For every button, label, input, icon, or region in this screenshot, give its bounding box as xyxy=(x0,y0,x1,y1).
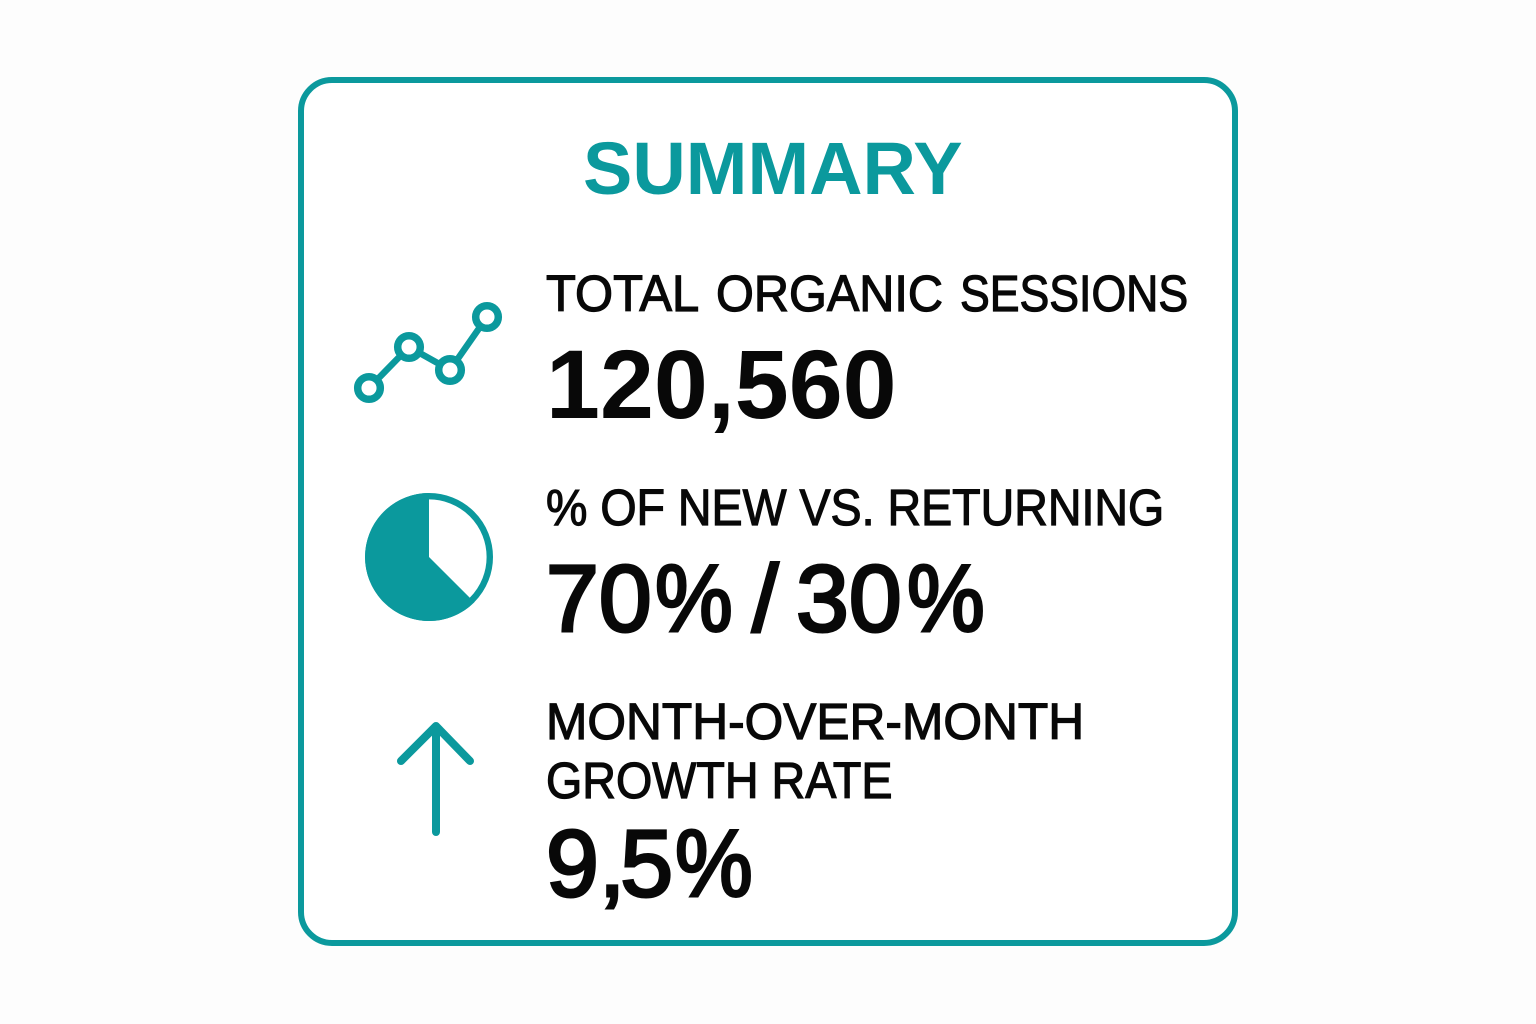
value: new vs returning xyxy=(546,546,984,652)
value: new vs returning: % xyxy=(655,546,732,652)
value: growth rate: % xyxy=(675,811,753,917)
label: total organic sessions: TOTAL xyxy=(546,265,699,322)
value: sessions: 120,560 xyxy=(546,330,897,439)
label: new vs returning: % OF NEW VS. RETURNING xyxy=(546,479,1164,536)
value: growth rate xyxy=(546,811,753,917)
label: total organic sessions: ORGANIC xyxy=(716,265,943,322)
label: month-over-month growth rate: GROWTH RATE xyxy=(546,752,893,809)
label: total organic sessions xyxy=(546,265,1188,322)
icon: up arrow xyxy=(397,722,474,836)
label: total organic sessions: SESSIONS xyxy=(960,265,1188,322)
title: SUMMARY xyxy=(583,127,963,210)
value: new vs returning: / xyxy=(752,546,778,652)
icon: pie chart xyxy=(365,493,493,621)
label: month-over-month growth rate: MONTH-OVER-MONTH xyxy=(546,693,1084,750)
value: new vs returning: 70 xyxy=(546,546,652,652)
value: new vs returning: 30 xyxy=(796,546,902,652)
label: month-over-month growth rate xyxy=(546,693,1084,809)
panel: summary card xyxy=(298,77,1238,946)
value: new vs returning: % xyxy=(907,546,984,652)
icon: line chart xyxy=(354,302,502,403)
value: growth rate: 9,5 xyxy=(546,811,673,917)
